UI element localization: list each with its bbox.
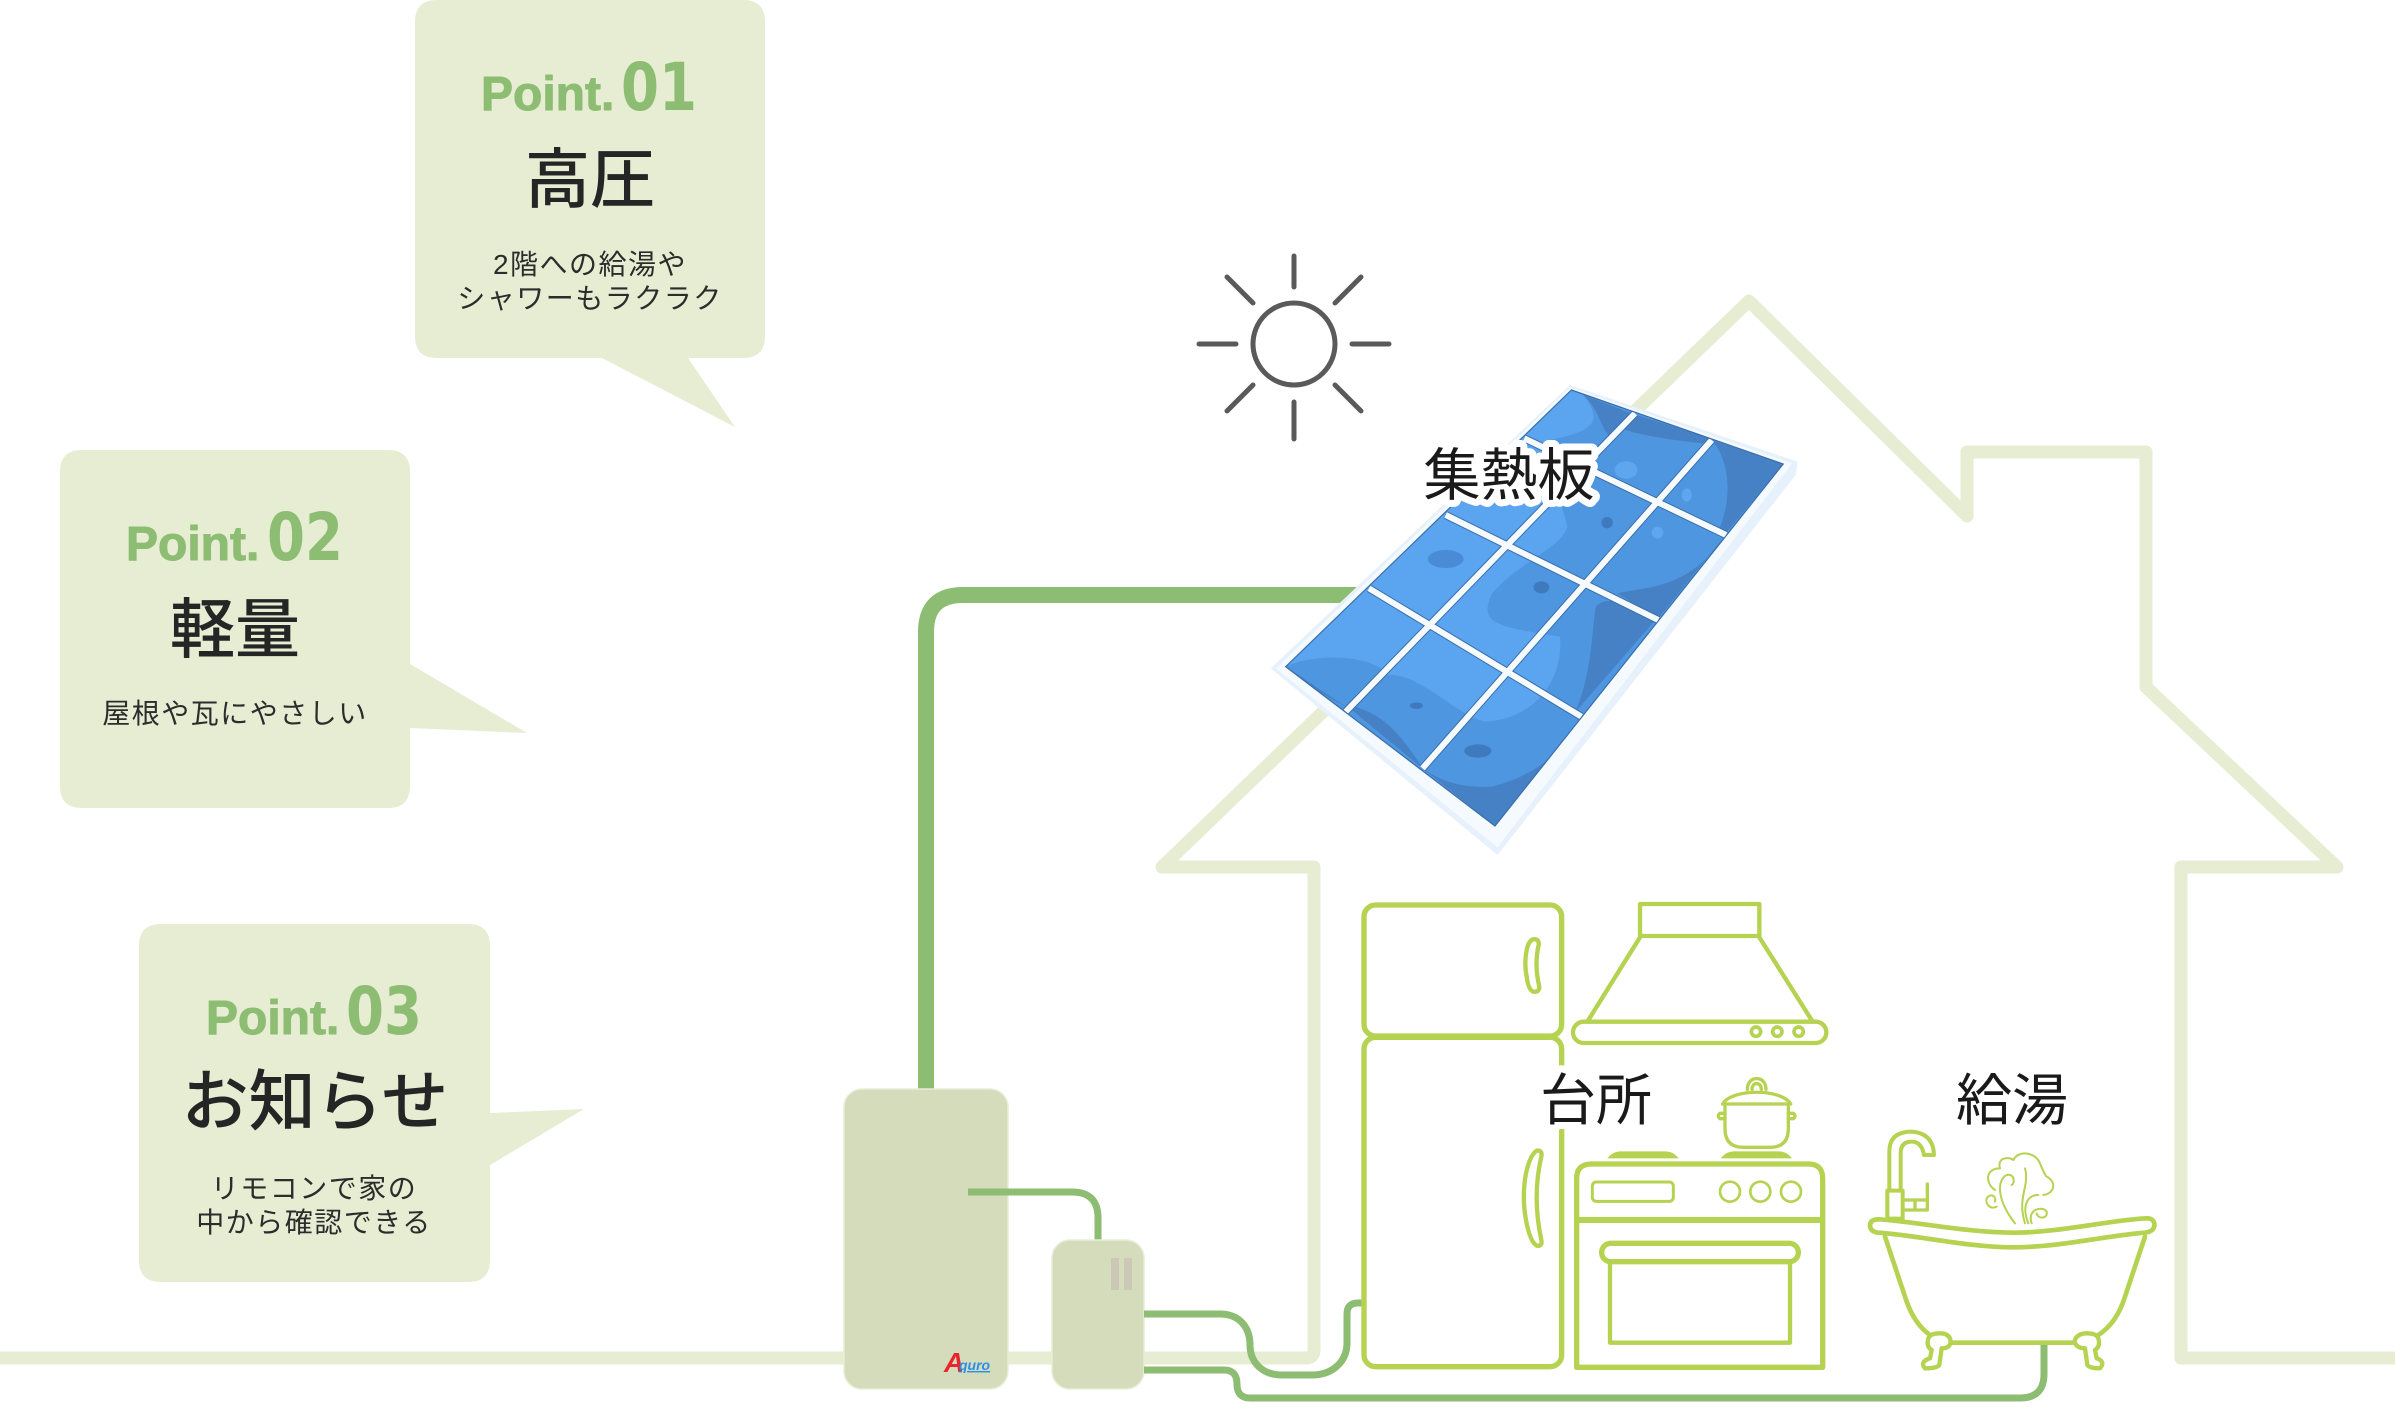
controller box [1052, 1240, 1144, 1389]
icon: steam [1986, 1153, 2053, 1223]
icon: bath feet [1923, 1333, 1951, 1368]
bubble: point 01 [415, 0, 765, 427]
bubble: point 02: 02 [267, 499, 343, 576]
bubble: point 03 [139, 924, 584, 1282]
label: hot water: 給湯 [1956, 1069, 2068, 1132]
bath and faucet [1870, 1132, 2154, 1368]
bubble: point 03: 中から確認できる [196, 1207, 432, 1238]
bubble: point 01: Point. [481, 68, 614, 121]
bubble: point 03: 03 [346, 973, 422, 1050]
pipe: controller to bath [1144, 1344, 2044, 1398]
logo: Aquro: A [943, 1347, 964, 1378]
bubble: point 01: シャワーもラクラク [457, 283, 723, 314]
icon: sun [1199, 256, 1389, 439]
bubble: point 02 [60, 450, 527, 808]
pipe: controller to kitchen [1144, 1303, 1364, 1375]
icon: burners [1607, 1151, 1792, 1158]
bubble: point 01: 高圧 [525, 143, 655, 216]
bubble: point 03: リモコンで家の [211, 1173, 417, 1204]
bubble: point 02: 軽量 [170, 593, 300, 666]
icon: pot [1718, 1079, 1795, 1147]
logo: Aquro [943, 1347, 991, 1378]
solar collector panel [1271, 385, 1797, 855]
main solar pipe [926, 595, 1370, 1095]
logo: Aquro: quro [959, 1357, 991, 1373]
icon: range hood [1573, 904, 1826, 1043]
icon: faucet [1889, 1132, 1934, 1190]
icon: bath body [1885, 1237, 2145, 1343]
bubble: point 03: Point. [206, 992, 339, 1045]
icon: fridge [1364, 905, 1562, 1367]
bubble: point 01: 2階への給湯や [493, 249, 687, 280]
storage tank [844, 1089, 1008, 1389]
bubble: point 02: Point. [126, 518, 259, 571]
icon: bath rim [1870, 1218, 2154, 1247]
kitchen: fridge, hood and oven [1364, 904, 1826, 1367]
icon: oven [1577, 1164, 1823, 1367]
label: collector: 集熱板 [1424, 444, 1594, 508]
label: kitchen: 台所 [1540, 1069, 1652, 1132]
bubble: point 01: 01 [621, 49, 697, 126]
bubble: point 02: 屋根や瓦にやさしい [102, 698, 368, 729]
house outline and ground line [0, 301, 2395, 1358]
pipe: tank to controller [968, 1192, 1098, 1241]
bubble: point 03: お知らせ [182, 1065, 448, 1140]
